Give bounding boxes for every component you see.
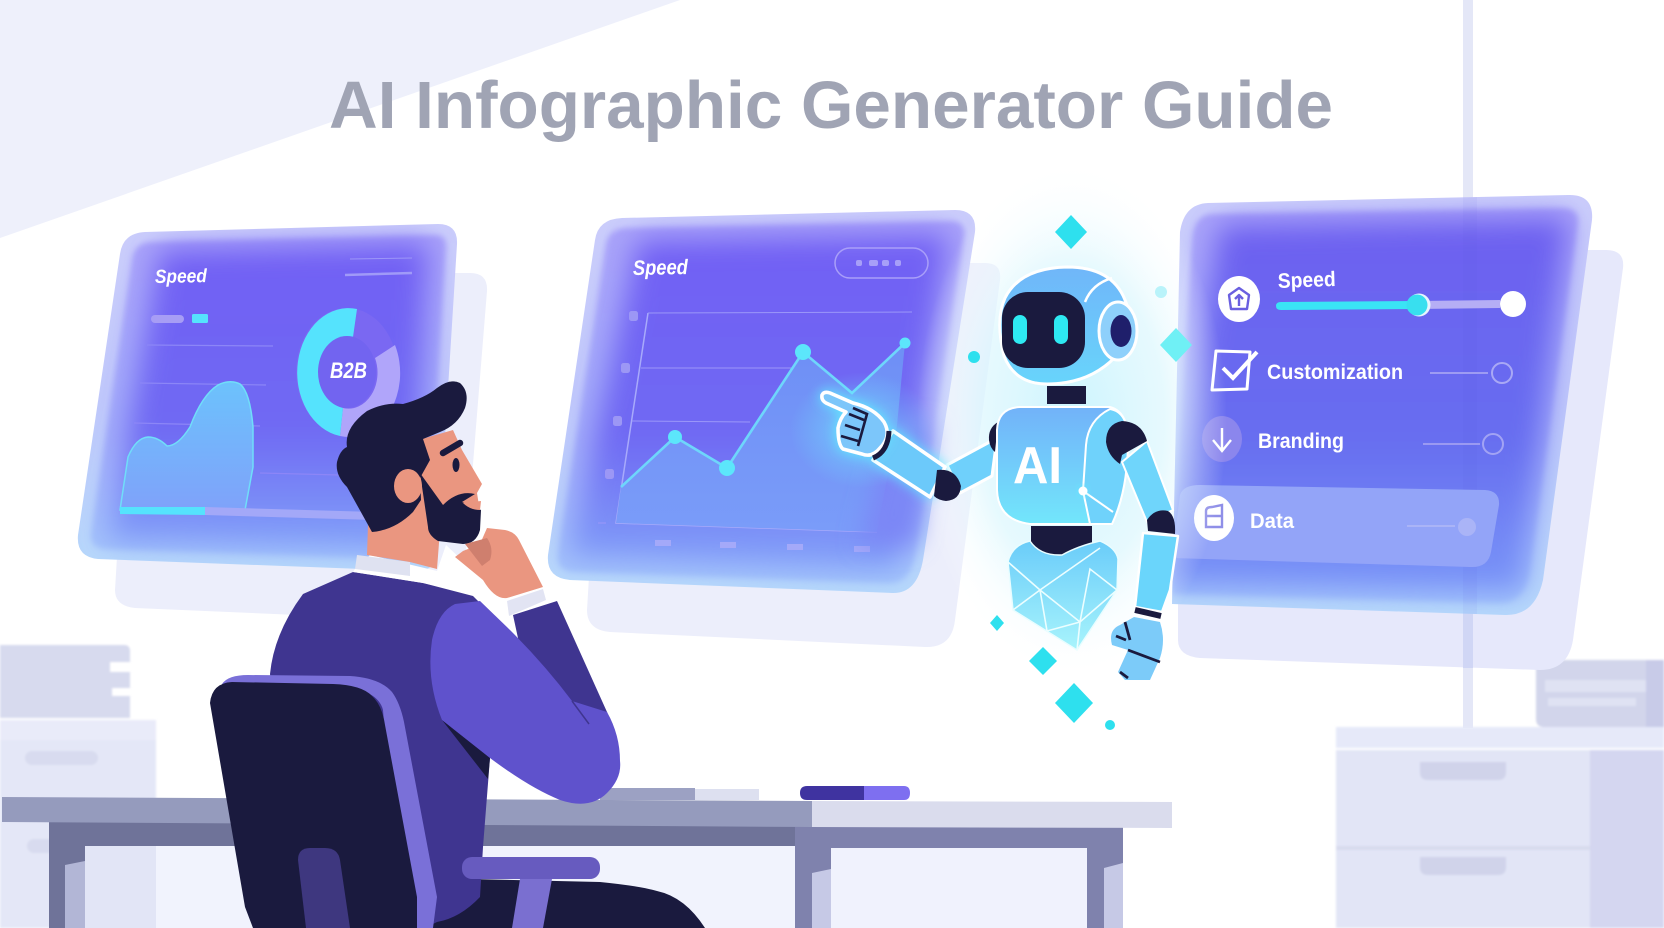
torso back	[270, 572, 510, 928]
line chart	[621, 338, 910, 487]
armrest	[462, 857, 600, 879]
title: AI Infographic Generator Guide	[329, 68, 1333, 143]
arm post	[512, 879, 552, 928]
chair back	[210, 682, 417, 928]
row: Branding	[1202, 416, 1503, 462]
seat	[420, 879, 705, 928]
face	[415, 430, 482, 530]
right cabinet with books	[1336, 660, 1664, 928]
area chart	[120, 382, 253, 510]
eye	[452, 458, 460, 472]
line chart area	[616, 343, 935, 545]
hand on chin	[455, 528, 543, 598]
row: Data	[1172, 485, 1499, 567]
row: Branding: Branding	[1258, 429, 1344, 453]
robot torso with AI label: AI	[1013, 437, 1062, 495]
robot torso with AI label	[997, 407, 1128, 524]
donut label: B2B	[330, 358, 367, 383]
robot right arm	[1106, 421, 1178, 680]
robot pointing arm	[822, 392, 998, 501]
hair	[337, 381, 467, 532]
chair frame	[222, 675, 437, 928]
chart grid and axes	[598, 312, 912, 532]
ear	[394, 469, 422, 503]
label: Speed: Speed	[155, 266, 207, 288]
panel: center line chart	[548, 210, 975, 593]
robot pelvis	[1008, 541, 1118, 650]
left cabinet with books	[0, 645, 156, 928]
shirt	[353, 545, 512, 635]
shadow under arm	[442, 720, 490, 779]
sparkles	[968, 215, 1192, 730]
row: Customization	[1212, 351, 1512, 390]
cuff	[507, 589, 546, 616]
chair back stripe	[298, 848, 350, 928]
office chair	[210, 675, 600, 928]
robot neck	[1047, 386, 1086, 404]
header lines	[345, 258, 412, 275]
sleeve crease	[572, 701, 589, 724]
row: Customization: Customization	[1267, 360, 1403, 384]
neck	[367, 505, 440, 569]
label: Speed: Speed	[633, 256, 689, 280]
collar	[355, 555, 410, 576]
robot glow	[790, 160, 1227, 680]
forearm	[513, 601, 617, 740]
eyebrow	[443, 443, 460, 453]
desk	[2, 786, 1172, 928]
robot head	[1000, 267, 1137, 384]
progress bar	[120, 507, 375, 520]
beard	[420, 473, 481, 544]
mouth	[463, 501, 481, 510]
window column	[1463, 0, 1473, 728]
panel: left dashboard	[78, 224, 457, 571]
robot waist	[1031, 526, 1092, 555]
panel: right settings	[1160, 190, 1592, 620]
legend chips	[151, 314, 208, 323]
businessman	[270, 381, 620, 928]
x axis labels	[655, 540, 870, 552]
sleeve	[430, 601, 620, 804]
row: Speed	[1218, 268, 1526, 322]
robot	[822, 215, 1192, 730]
y axis ticks	[605, 311, 638, 479]
panel shadows	[115, 250, 1623, 670]
pill control	[835, 248, 928, 278]
row: Speed: Speed	[1277, 268, 1336, 293]
donut chart	[296, 308, 400, 437]
row: Data: Data	[1250, 510, 1294, 533]
grid lines	[134, 345, 340, 475]
